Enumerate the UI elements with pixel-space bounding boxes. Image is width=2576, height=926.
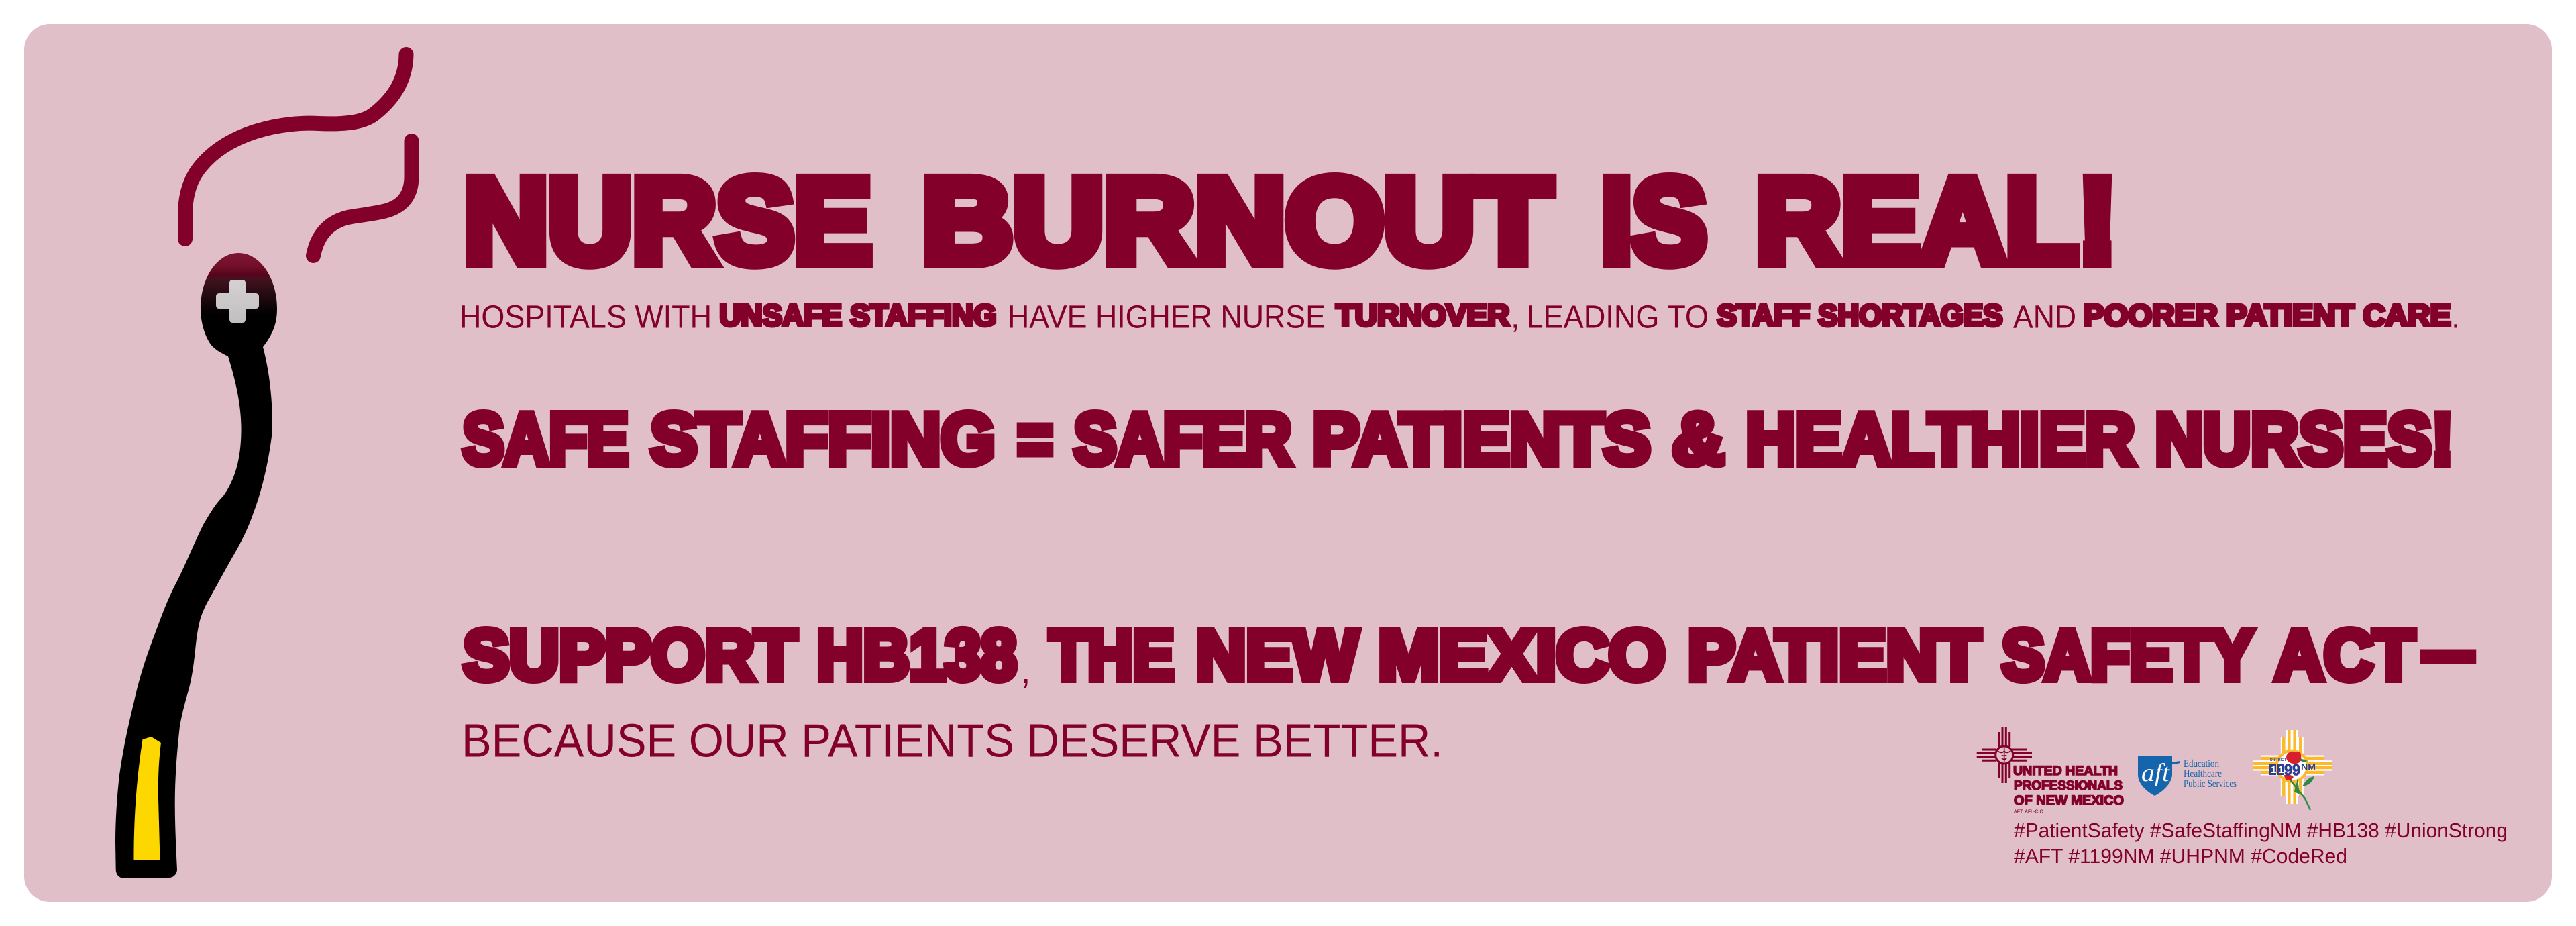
headline: safe staffing <box>463 399 2454 480</box>
district 1199 wordmark <box>2269 758 2316 780</box>
headline: support HB138: SAFETY <box>2002 616 2254 695</box>
headline: safe staffing: & <box>1672 399 1724 480</box>
title: REAL! <box>1756 154 2117 288</box>
title: IS <box>1601 154 1707 288</box>
zia symbol with caduceus <box>1977 727 2032 783</box>
district 1199 wordmark: 1 <box>2278 764 2284 776</box>
aft wordmark: aft <box>2141 759 2170 787</box>
headline: support HB138: MEXICO <box>1378 616 1665 695</box>
headline: safe staffing: NURSES! <box>2155 399 2454 480</box>
district 1199 wordmark: 99 <box>2284 761 2300 780</box>
title: BURNOUT <box>922 154 1552 288</box>
headline: safe staffing: SAFE <box>463 399 629 480</box>
headline: safe staffing: PATIENTS <box>1312 399 1650 480</box>
subtitle text block: POORER PATIENT CARE <box>2084 298 2451 333</box>
shield <box>2138 756 2172 796</box>
headline: support HB138: ACT <box>2275 616 2415 695</box>
district 1199 wordmark: 1 <box>2271 764 2276 776</box>
subtitle text block: LEADING TO <box>1527 299 1709 336</box>
headline: safe staffing: = <box>1017 399 1053 480</box>
subtitle text block: . <box>2451 299 2460 336</box>
title: NURSE <box>464 154 871 288</box>
headline: support HB138: THE <box>1049 616 1174 695</box>
headline: safe staffing: HEALTHIER <box>1746 399 2135 480</box>
headline: support HB138: HB138 <box>817 616 1017 695</box>
smoke curl: upper <box>185 54 407 239</box>
hashtags: #PatientSafety #SafeStaffingNM #HB138 #UnionStrong <box>2014 819 2508 842</box>
headline: support HB138: , <box>1020 649 1031 691</box>
district 1199 wordmark: NM <box>2301 762 2316 772</box>
title <box>464 154 2117 288</box>
headline: support HB138: PATIENT <box>1688 616 1980 695</box>
subtitle text block: HOSPITALS WITH <box>460 299 712 336</box>
subtitle text block: STAFF SHORTAGES <box>1717 298 2003 333</box>
subtitle text block: TURNOVER <box>1336 298 1509 333</box>
logo: AFT: Public Services <box>2184 778 2237 790</box>
subtitle text block: HAVE HIGHER NURSE <box>1008 299 1326 336</box>
swoosh <box>2164 761 2180 765</box>
logo: AFT <box>2138 756 2237 796</box>
rose <box>2284 752 2301 780</box>
zia outline <box>2253 730 2332 804</box>
headline: support HB138: NEW <box>1195 616 1358 695</box>
headline: safe staffing: SAFER <box>1073 399 1292 480</box>
hashtags <box>2014 819 2508 868</box>
medical cross on match head <box>216 280 259 323</box>
logo: AFT: Education <box>2184 758 2219 770</box>
logo: United Health Professionals of New Mexico: PROFESSIONALS <box>2014 779 2123 793</box>
rose stem and leaves <box>2289 778 2310 810</box>
match body <box>115 253 277 878</box>
unburnt yellow strip <box>133 737 161 860</box>
logo: District 1199NM <box>2253 730 2332 810</box>
headline: support HB138: — <box>2423 612 2473 691</box>
closing text block: BECAUSE OUR PATIENTS DESERVE BETTER. <box>462 714 1443 766</box>
headline: support HB138: SUPPORT <box>463 616 797 695</box>
logo: United Health Professionals of New Mexico: UNITED HEALTH <box>2013 764 2118 778</box>
logo: United Health Professionals of New Mexico: OF NEW MEXICO <box>2014 794 2124 808</box>
logo: United Health Professionals of New Mexico: AFT, AFL-CIO <box>2014 809 2044 815</box>
subtitle text block <box>460 298 2460 336</box>
logo: AFT: Healthcare <box>2184 768 2222 780</box>
subtitle text block: UNSAFE STAFFING <box>719 298 997 333</box>
smoke curl: lower <box>313 141 412 256</box>
district 1199 wordmark: DISTRICT <box>2270 758 2286 762</box>
headline: safe staffing: STAFFING <box>651 399 996 480</box>
icon: burnt match with smoke <box>115 54 412 878</box>
hashtags: #AFT #1199NM #UHPNM #CodeRed <box>2014 844 2347 868</box>
headline: support HB138 <box>463 612 2473 695</box>
subtitle text block: AND <box>2013 299 2076 336</box>
subtitle text block: , <box>1511 299 1519 336</box>
logo: United Health Professionals of New Mexico <box>1977 727 2124 815</box>
